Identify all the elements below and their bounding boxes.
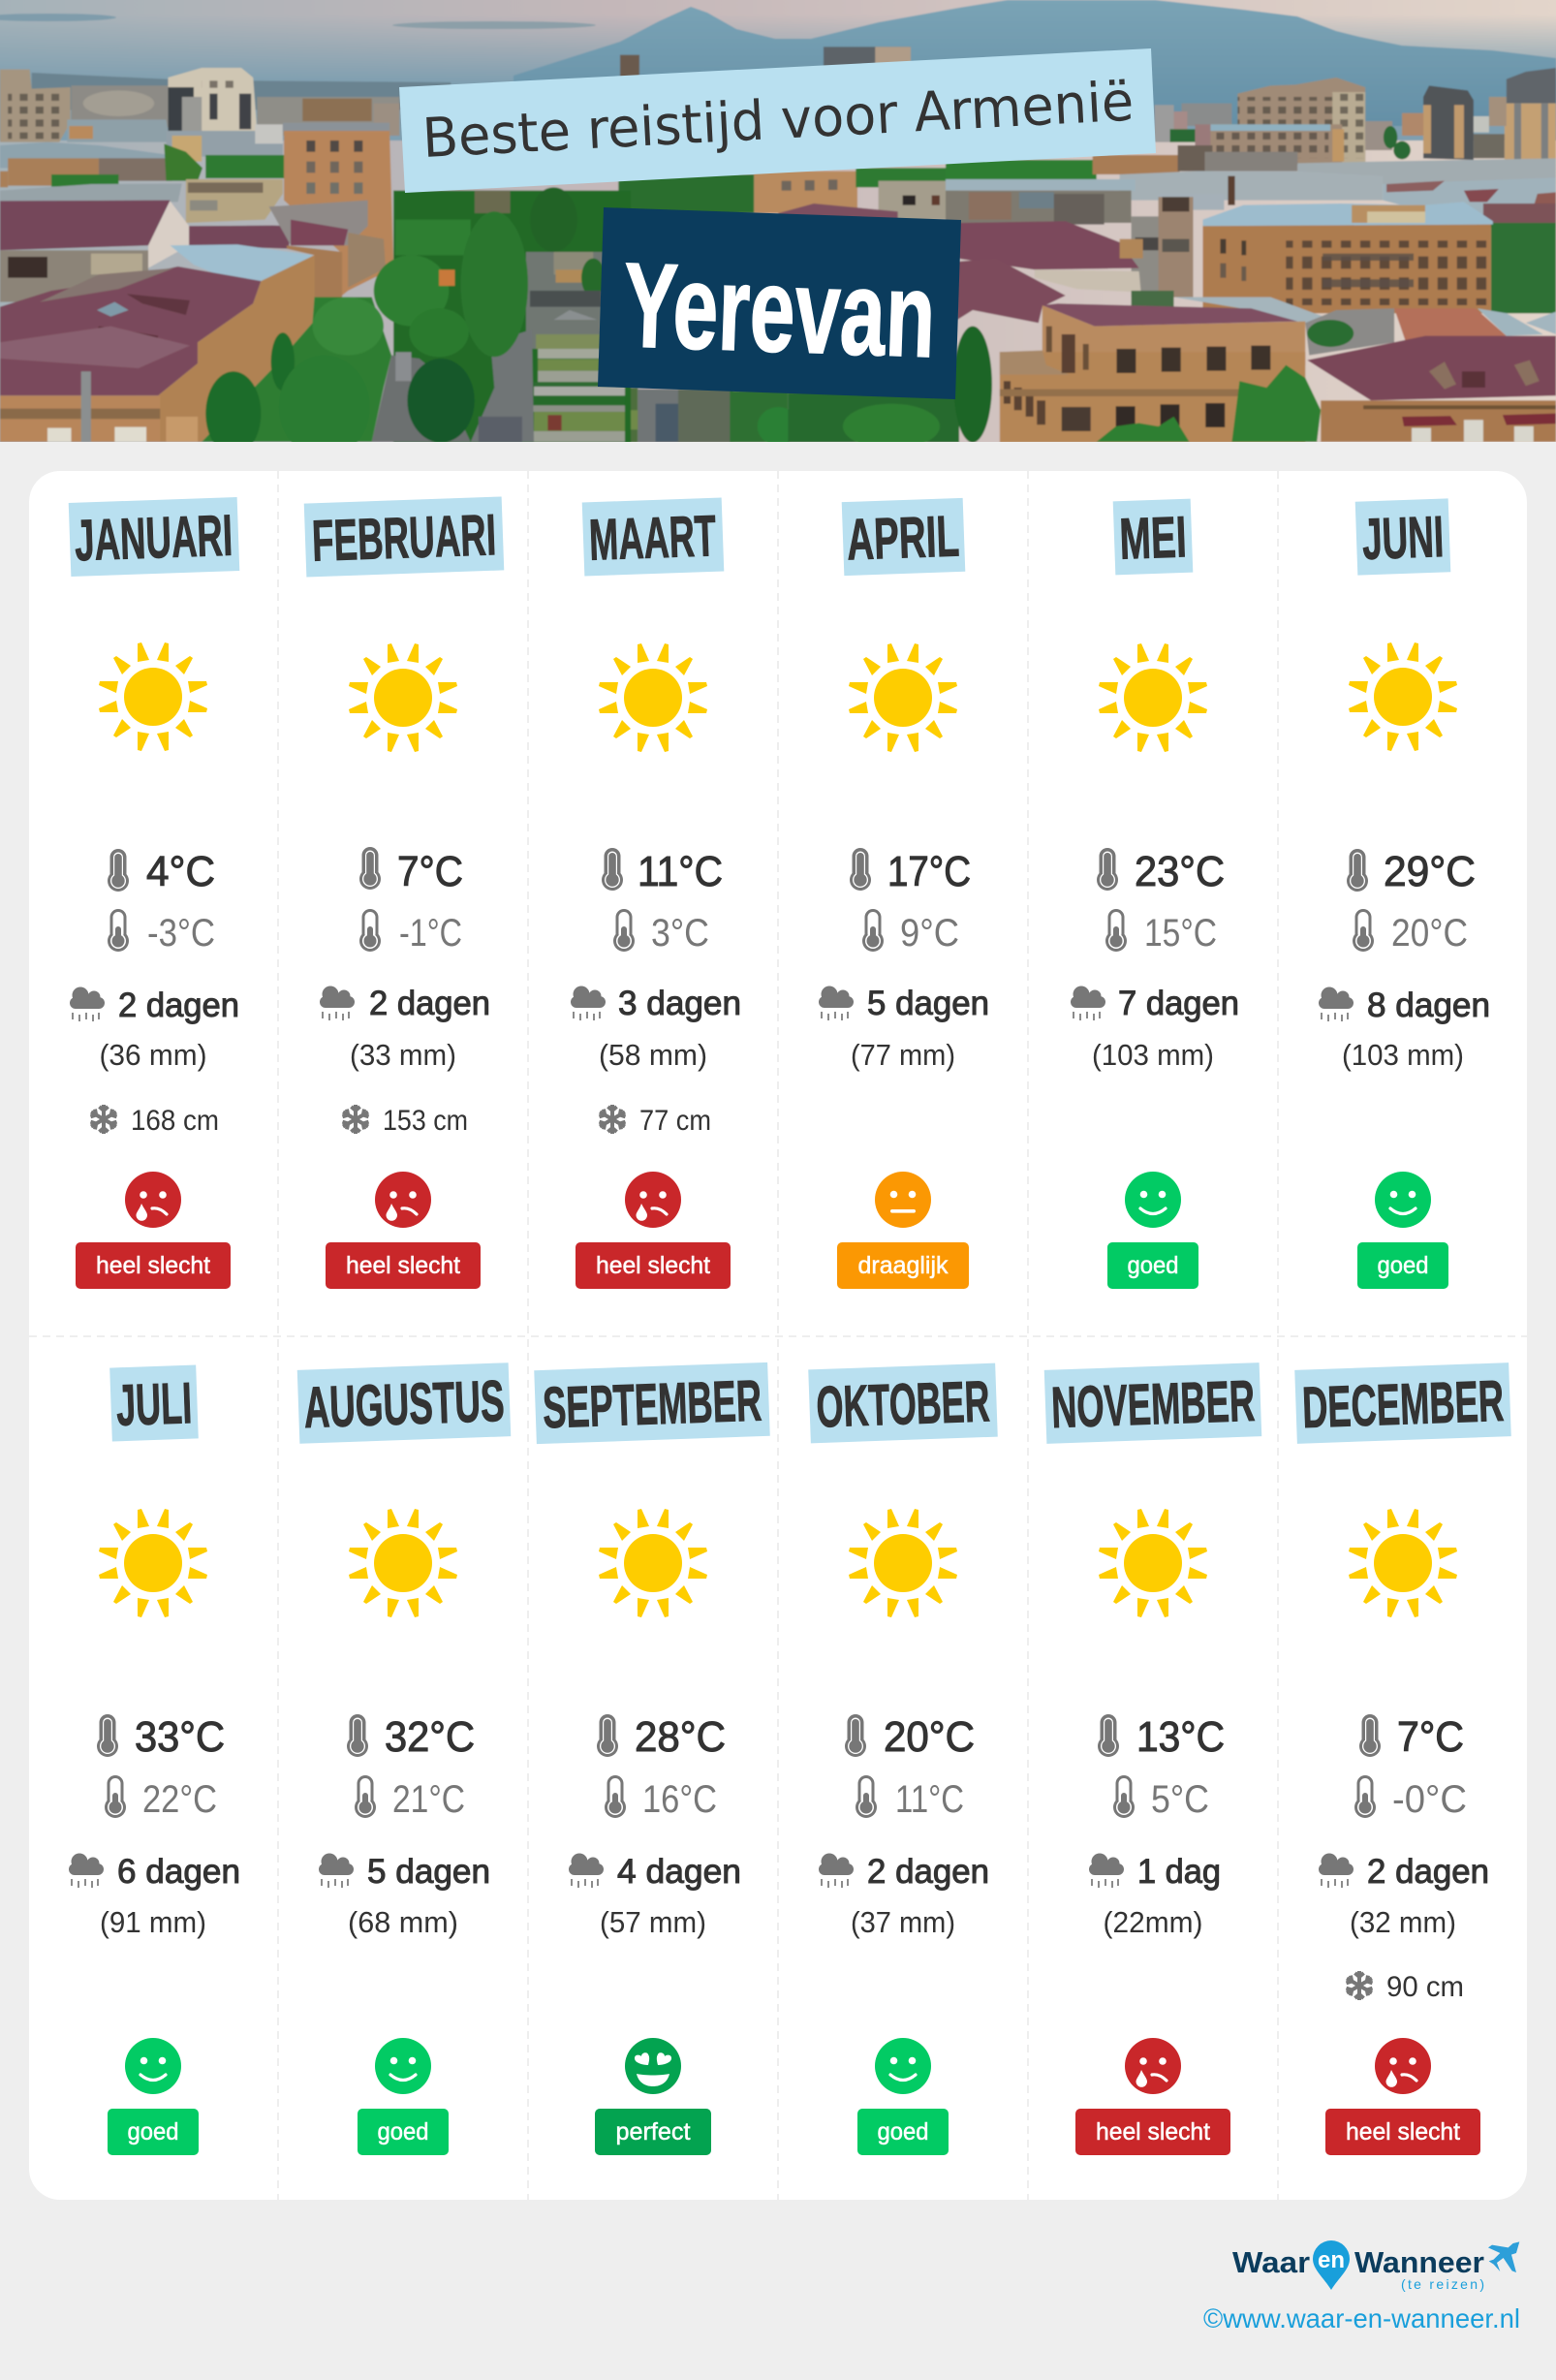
low temperature: 11°C (895, 1778, 964, 1821)
rating badge (837, 1242, 969, 1289)
high temperature (1347, 848, 1476, 895)
month label (842, 498, 965, 576)
column: november (1044, 1362, 1261, 2155)
low temperature: 21°C (392, 1778, 465, 1821)
city heading: Yerevan: Yerevan (621, 238, 938, 383)
rating badge (857, 2109, 949, 2155)
icon: sad face (625, 1172, 681, 1228)
rating badge: heel slecht (96, 1252, 210, 1279)
icon: sun (849, 643, 957, 752)
icon: airplane (1488, 2241, 1519, 2272)
precipitation: (77 mm) (851, 1038, 955, 1072)
month label: JUNI (1361, 504, 1445, 572)
precipitation: (68 mm) (348, 1905, 458, 1939)
icon: sad face (1375, 2038, 1431, 2094)
icon: sun (99, 642, 207, 751)
high temperature (850, 848, 971, 895)
month label (297, 1362, 511, 1444)
photo mid section (618, 47, 962, 449)
high temperature: 32°C (385, 1713, 475, 1761)
precipitation: (37 mm) (851, 1905, 955, 1939)
icon: sun (99, 1509, 207, 1617)
icon: smiling face (375, 2038, 431, 2094)
high temperature (359, 847, 463, 895)
column: juli (69, 1364, 240, 2155)
low temperature: 20°C (1391, 912, 1468, 955)
high temperature: 4°C (146, 848, 215, 895)
low temperature (862, 909, 959, 955)
column: september (534, 1362, 770, 2155)
logo: Waar en Wanneer (1232, 2240, 1519, 2292)
icon: sun (1099, 643, 1207, 752)
month label (808, 1363, 998, 1443)
rating badge (76, 1242, 231, 1289)
low temperature: -1°C (399, 912, 462, 955)
rating badge (1107, 1242, 1198, 1289)
high temperature: 20°C (884, 1713, 975, 1761)
rain days: 2 dagen (1367, 1853, 1489, 1891)
rain days: 2 dagen (867, 1853, 989, 1891)
high temperature: 11°C (638, 848, 723, 895)
website credit: ©www.waar-en-wanneer.nl (1203, 2303, 1520, 2333)
low temperature (1105, 909, 1217, 955)
snow (341, 1105, 468, 1137)
month label: SEPTEMBER (542, 1368, 762, 1440)
icon: sun (849, 1509, 957, 1617)
rating badge: draaglijk (858, 1252, 949, 1279)
month label (1113, 499, 1193, 575)
month label: NOVEMBER (1050, 1368, 1256, 1440)
low temperature: 16°C (642, 1778, 717, 1821)
logo: Waar en Wanneer: Waar (1232, 2245, 1310, 2279)
low temperature: 9°C (900, 912, 959, 955)
icon: sun (349, 643, 457, 752)
icon: map pin (1313, 2240, 1350, 2290)
snow (89, 1105, 219, 1137)
high temperature (1359, 1713, 1464, 1761)
title banner: Beste reistijd voor Armenië (420, 71, 1136, 171)
photo left section (0, 68, 631, 458)
icon: smiling face (1125, 1172, 1181, 1228)
header photo: Yerevan skyline with mountain (0, 0, 1556, 465)
column: maart (571, 498, 741, 1289)
rating badge (108, 2109, 199, 2155)
month label (304, 496, 504, 578)
rating badge (595, 2109, 711, 2155)
low temperature (613, 909, 709, 955)
month label: FEBRUARI (311, 502, 497, 574)
month label (1044, 1362, 1261, 1444)
rating badge (1075, 2109, 1230, 2155)
month label (1355, 498, 1450, 576)
column: april (819, 498, 989, 1289)
rating badge: goed (1128, 1252, 1178, 1279)
rating badge (358, 2109, 449, 2155)
rain days: 8 dagen (1367, 986, 1490, 1024)
precipitation: (36 mm) (99, 1038, 207, 1072)
high temperature (97, 1713, 225, 1761)
month label (109, 1364, 199, 1442)
rating badge (326, 1242, 481, 1289)
high temperature: 33°C (135, 1713, 225, 1761)
column: december (1294, 1362, 1511, 2155)
rain days: 6 dagen (117, 1853, 240, 1891)
rating badge: heel slecht (346, 1252, 460, 1279)
low temperature: 3°C (651, 912, 709, 955)
high temperature: 28°C (635, 1713, 726, 1761)
icon: sun (349, 1509, 457, 1617)
rating badge (576, 1242, 731, 1289)
logo: Waar en Wanneer: en (1318, 2247, 1345, 2273)
rain days: 2 dagen (369, 985, 490, 1022)
precipitation: (103 mm) (1342, 1038, 1464, 1072)
column: augustus (297, 1362, 511, 2155)
month label (69, 497, 239, 577)
rating badge: goed (128, 2118, 178, 2145)
rain days: 2 dagen (118, 986, 239, 1024)
rain days: 5 dagen (367, 1853, 490, 1891)
precipitation: (91 mm) (100, 1905, 206, 1939)
snow: 153 cm (383, 1105, 468, 1137)
precipitation: (103 mm) (1092, 1038, 1214, 1072)
snow: 168 cm (131, 1105, 219, 1137)
icon: sun (1099, 1509, 1207, 1617)
icon: sun (1349, 642, 1457, 751)
snow: 77 cm (639, 1105, 711, 1137)
rain days: 5 dagen (867, 985, 989, 1022)
icon: sun (1349, 1509, 1457, 1617)
icon: smiling face (1375, 1172, 1431, 1228)
low temperature (108, 909, 215, 955)
column: juni (1319, 498, 1490, 1289)
photo right section (946, 68, 1556, 443)
low temperature (856, 1775, 964, 1821)
icon: sun (599, 643, 707, 752)
rain days: 1 dag (1137, 1853, 1221, 1891)
icon: smiling face (125, 2038, 181, 2094)
low temperature (1113, 1775, 1209, 1821)
low temperature (1353, 909, 1468, 955)
logo: Waar en Wanneer: (te reizen) (1401, 2276, 1484, 2292)
month label: MEI (1118, 504, 1188, 572)
city heading: Yerevan (598, 207, 961, 399)
rating badge: goed (878, 2118, 928, 2145)
low temperature (105, 1775, 217, 1821)
high temperature (1098, 1713, 1225, 1761)
low temperature: 5°C (1151, 1778, 1209, 1821)
month label: JULI (115, 1370, 193, 1438)
low temperature (355, 1775, 465, 1821)
high temperature: 13°C (1136, 1713, 1225, 1761)
rating badge: perfect (616, 2118, 691, 2145)
precipitation: (32 mm) (1350, 1905, 1456, 1939)
low temperature: 22°C (142, 1778, 217, 1821)
high temperature: 7°C (397, 848, 463, 895)
snow (598, 1105, 711, 1137)
high temperature: 7°C (1397, 1713, 1464, 1761)
rain days (1089, 1853, 1221, 1891)
high temperature: 29°C (1384, 848, 1476, 895)
rating badge: heel slecht (1346, 2118, 1460, 2145)
month label (534, 1362, 770, 1444)
column: januari (69, 497, 239, 1289)
precipitation: (57 mm) (600, 1905, 706, 1939)
rating badge: heel slecht (596, 1252, 710, 1279)
rating badge: goed (1378, 1252, 1428, 1279)
icon: sad face (1125, 2038, 1181, 2094)
high temperature (1097, 848, 1225, 895)
high temperature (845, 1713, 975, 1761)
column: oktober (808, 1363, 998, 2155)
high temperature: 23°C (1135, 848, 1225, 895)
high temperature (602, 848, 723, 895)
low temperature (359, 909, 462, 955)
month label: AUGUSTUS (302, 1368, 506, 1440)
month label: OKTOBER (815, 1368, 991, 1440)
logo: Waar en Wanneer: Wanneer (1354, 2245, 1484, 2279)
month label: MAART (588, 503, 717, 573)
icon: heart-eyes face (625, 2038, 681, 2094)
high temperature: 17°C (887, 848, 971, 895)
panel: monthly climate table (29, 471, 1527, 2200)
rating badge (1357, 1242, 1448, 1289)
high temperature (108, 848, 215, 895)
icon: sad face (125, 1172, 181, 1228)
snow: 90 cm (1386, 1971, 1464, 2003)
rating badge: goed (378, 2118, 428, 2145)
month label: JANUARI (74, 503, 233, 573)
rain days: 4 dagen (617, 1853, 741, 1891)
title banner (399, 48, 1156, 193)
low temperature: -0°C (1392, 1778, 1467, 1821)
low temperature (605, 1775, 717, 1821)
snow (1345, 1971, 1464, 2003)
month label: APRIL (846, 503, 960, 573)
icon: smiling face (875, 2038, 931, 2094)
icon: neutral face (875, 1172, 931, 1228)
icon: sad face (375, 1172, 431, 1228)
low temperature: 15°C (1144, 912, 1217, 955)
low temperature: -3°C (147, 912, 215, 955)
rating badge: heel slecht (1096, 2118, 1210, 2145)
high temperature (597, 1713, 726, 1761)
rating badge (1325, 2109, 1480, 2155)
column: mei (1071, 499, 1239, 1289)
high temperature (347, 1713, 475, 1761)
precipitation: (22mm) (1103, 1905, 1203, 1939)
rain days: 3 dagen (618, 985, 741, 1022)
column: februari (304, 496, 504, 1289)
month label (582, 498, 724, 576)
icon: sun (599, 1509, 707, 1617)
precipitation: (33 mm) (350, 1038, 456, 1072)
low temperature (1354, 1775, 1467, 1821)
precipitation: (58 mm) (599, 1038, 707, 1072)
rain days: 7 dagen (1118, 985, 1239, 1022)
